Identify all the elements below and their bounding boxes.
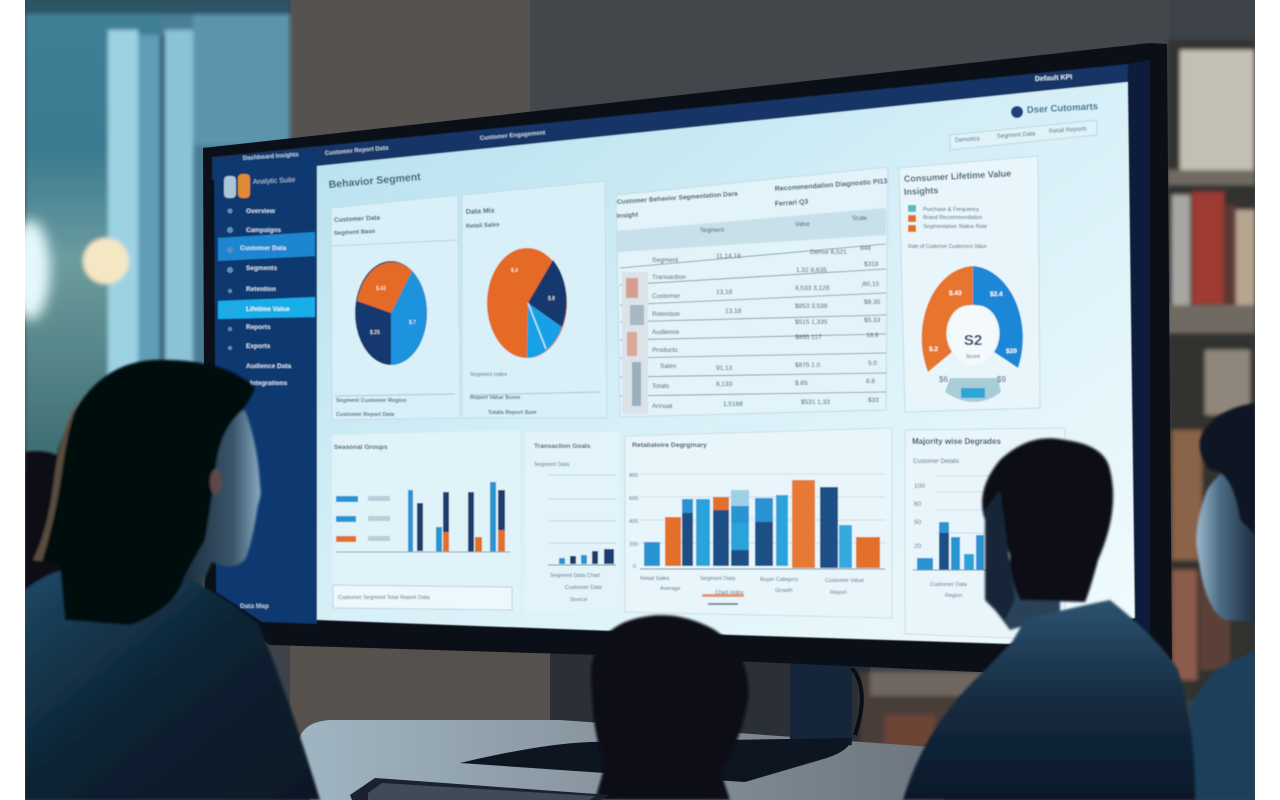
panel: pie two: Segment Index	[470, 372, 507, 378]
panel: table: 13,18	[725, 308, 742, 315]
panel: table: $875 1.0	[795, 362, 821, 369]
panel: table: Ferrari Q3	[775, 199, 809, 208]
panel: table: Dense 6,521	[810, 249, 847, 256]
tab row	[950, 120, 1097, 150]
panel: pie one: Segment Customer Region	[336, 398, 407, 404]
window	[10, 0, 290, 475]
panel: table: $8.35	[864, 299, 881, 306]
bars	[644, 480, 880, 568]
sidebar	[214, 150, 317, 624]
screen title: Behavior Segment	[328, 171, 422, 191]
tab row: Segment Data	[997, 131, 1036, 140]
chart: donut: $9	[997, 375, 1006, 384]
chart: pie two: $.4	[511, 268, 518, 274]
panel: table: $.85	[795, 380, 808, 387]
panel: bar chart left: Seasonal Groups	[334, 444, 388, 451]
panel: table: ,60,15	[861, 281, 879, 288]
panel: table: 13,18	[716, 289, 733, 296]
panel: table: Annual	[652, 403, 673, 410]
panel: table: Retention	[652, 311, 680, 318]
sidebar items: Overview	[246, 208, 276, 215]
panel: pie two: Retail Sales	[466, 222, 500, 230]
chart: donut: $20	[1006, 348, 1017, 355]
chart: pie one: $.25	[370, 330, 380, 336]
desk	[298, 720, 945, 800]
panel: table: $895 117	[795, 334, 822, 341]
panel: table: Sales	[660, 363, 677, 370]
panel: table: 1,5168	[723, 401, 743, 408]
chart: pie one: $.7	[409, 320, 416, 326]
panel: customer lifetime value: Insights	[904, 185, 939, 197]
panel: majority wise degrades: Region	[945, 593, 962, 599]
panel: pie one	[331, 195, 460, 420]
brand title: Dser Cutomarts	[1027, 101, 1098, 116]
panel: pie two: Report Value Score	[470, 395, 520, 401]
panel: table: $318	[864, 261, 879, 268]
sidebar items: Exports	[246, 343, 271, 350]
chart: pie one: $.43	[376, 286, 386, 292]
panel: bar chart left: Customer Segment Total Report Data	[338, 595, 431, 601]
panel: table	[616, 167, 888, 417]
panel: bar chart left	[332, 430, 520, 612]
screen group	[212, 64, 1135, 644]
bezel	[203, 43, 1172, 673]
panel: customer lifetime value	[899, 156, 1040, 412]
panel: pie one: Customer Report Data	[336, 412, 395, 418]
panel: table: $515 1,335	[795, 319, 828, 326]
person: man at right	[903, 438, 1195, 800]
chart: donut: Score	[966, 354, 980, 360]
panel: table: 11,14,18	[716, 253, 741, 260]
panel: frequency bar chart: Average	[660, 586, 680, 592]
table thumbnails	[622, 272, 648, 414]
panel: table: Scale	[852, 216, 868, 222]
bars	[336, 482, 505, 552]
panel: pie two: Totals Report Sum	[488, 410, 537, 416]
panel: table: 18.8	[866, 332, 879, 339]
sidebar items: Retention	[246, 286, 276, 293]
tab row: Demotics	[955, 136, 980, 144]
panel: frequency bar chart	[625, 428, 892, 618]
monitor	[203, 43, 1172, 782]
panel: majority wise degrades: 100	[914, 483, 925, 490]
panel: table: Customer	[652, 293, 681, 300]
panel: frequency bar chart: Growth	[775, 588, 793, 594]
person: child in centre	[591, 615, 748, 800]
panel: small line chart: Segment Data	[534, 462, 570, 468]
sidebar items: Campaigns	[246, 227, 281, 234]
panel: table: $531 1,33	[801, 399, 830, 406]
screen group: Customer Report Data	[325, 145, 389, 157]
panel: table: Segment	[700, 228, 724, 234]
legend	[908, 205, 987, 250]
panel: majority wise degrades: Majority wise Degrades	[912, 437, 1001, 446]
panel: table: Segment	[652, 257, 678, 264]
panel: small line chart: Transaction Goals	[534, 443, 591, 450]
panel: table: 1.32 8,635	[796, 267, 827, 274]
panel: frequency bar chart: 400	[629, 519, 638, 525]
panel: pie two: Data Mix	[466, 207, 495, 216]
panel: frequency bar chart: Segment Data	[700, 576, 736, 582]
sidebar items: Reports	[246, 324, 271, 331]
panel: small line chart: Source	[570, 597, 587, 603]
panel: majority wise degrades: 60	[914, 501, 922, 508]
legend: Segmentation Status Rate	[923, 224, 987, 230]
panel: table: Value	[795, 222, 811, 228]
screen group: Customer Engagement	[480, 130, 546, 142]
header text: Default KPI	[1035, 74, 1072, 83]
screen group: Dashboard Insights	[243, 152, 300, 162]
panel: majority wise degrades: Customer Details	[913, 459, 959, 465]
panel: frequency bar chart: Report	[830, 590, 847, 596]
panel: pie two	[462, 181, 607, 418]
chart: donut: $.2	[929, 346, 938, 353]
panel: frequency bar chart: Customer Value	[825, 578, 864, 584]
panel: table: Transaction	[652, 274, 686, 281]
panel: small line chart: Customer Data	[565, 585, 603, 591]
person: woman at left	[25, 360, 320, 800]
screen content	[317, 82, 1135, 644]
monitor stand	[460, 660, 862, 782]
chart: pie two: $.8	[548, 296, 555, 302]
sidebar items: Segments	[246, 265, 277, 272]
keyboard	[350, 778, 610, 800]
panel: table: Insight	[617, 211, 639, 220]
panel: frequency bar chart: 600	[629, 496, 638, 502]
legend: Brand Recommendation	[923, 215, 982, 221]
chart: donut: $.43	[949, 290, 962, 297]
panel: table: Customer Behavior Segmentation Dara	[617, 191, 738, 206]
chart: donut: $2.4	[990, 291, 1003, 298]
panel: majority wise degrades: 50	[914, 519, 922, 526]
chart: pie one	[355, 261, 427, 365]
sidebar items: Integrations	[250, 380, 288, 387]
panel: frequency bar chart: Chart Index	[715, 590, 744, 596]
chart: donut	[922, 266, 1023, 402]
panel: small line chart	[525, 432, 620, 612]
panel: frequency bar chart: 800	[629, 473, 638, 479]
panel: pie one: Segment Base	[334, 229, 376, 237]
sidebar items: Lifetime Value	[246, 306, 290, 313]
tab row: Retail Reports	[1049, 126, 1087, 135]
panel: table: $33	[868, 397, 879, 404]
panel: majority wise degrades: Customer Data	[930, 582, 968, 588]
panel: table: Totals	[652, 383, 670, 390]
sidebar items: Audience Data	[246, 363, 292, 370]
panel: table: 8,533 3,128	[795, 285, 830, 292]
panel: majority wise degrades: 20	[914, 543, 922, 550]
legend: Purchase & Frequency	[923, 207, 979, 213]
sidebar items: Customer Data	[240, 245, 287, 252]
chart: pie two	[487, 248, 567, 358]
panel: small line chart: Segment Data Chart	[550, 573, 601, 579]
chart: donut: S2	[964, 332, 982, 349]
person: right edge man	[1190, 403, 1255, 800]
panel: table: Recommendation Diagnostic PI13	[775, 178, 888, 193]
panel: table: 8,133	[716, 381, 733, 388]
sidebar items: Analytic Suite	[253, 177, 296, 186]
panel: frequency bar chart: Retaliatoire Degrginary	[632, 442, 707, 449]
panel: table: Products	[652, 347, 678, 354]
panel: frequency bar chart: Retail Sales	[640, 576, 670, 582]
panel: pie one: Customer Data	[334, 215, 381, 224]
bookshelf	[860, 40, 1255, 747]
panel: frequency bar chart: Buyer Category	[760, 577, 798, 583]
panel: table: $5.33	[864, 317, 881, 324]
panel: table: 91,13	[716, 365, 733, 372]
panel: table: Audience	[652, 329, 679, 336]
sidebar items: Data Map	[240, 603, 269, 610]
sidebar items	[218, 174, 315, 610]
panel: frequency bar chart: 0	[633, 564, 636, 570]
panel: table: 848	[860, 245, 871, 252]
panel: frequency bar chart: 200	[629, 542, 638, 548]
legend: Rate of Customer Customers Value	[908, 244, 987, 250]
panel: customer lifetime value: Consumer Lifetime Value	[904, 168, 1011, 184]
panel: majority wise degrades	[905, 428, 1065, 640]
chart: donut: $6	[939, 375, 948, 384]
panel: table: $853 3,538	[795, 303, 828, 310]
panel: table: 8.8	[866, 378, 875, 385]
screen header band	[212, 64, 1128, 180]
panel: table: 5.0	[868, 360, 877, 367]
